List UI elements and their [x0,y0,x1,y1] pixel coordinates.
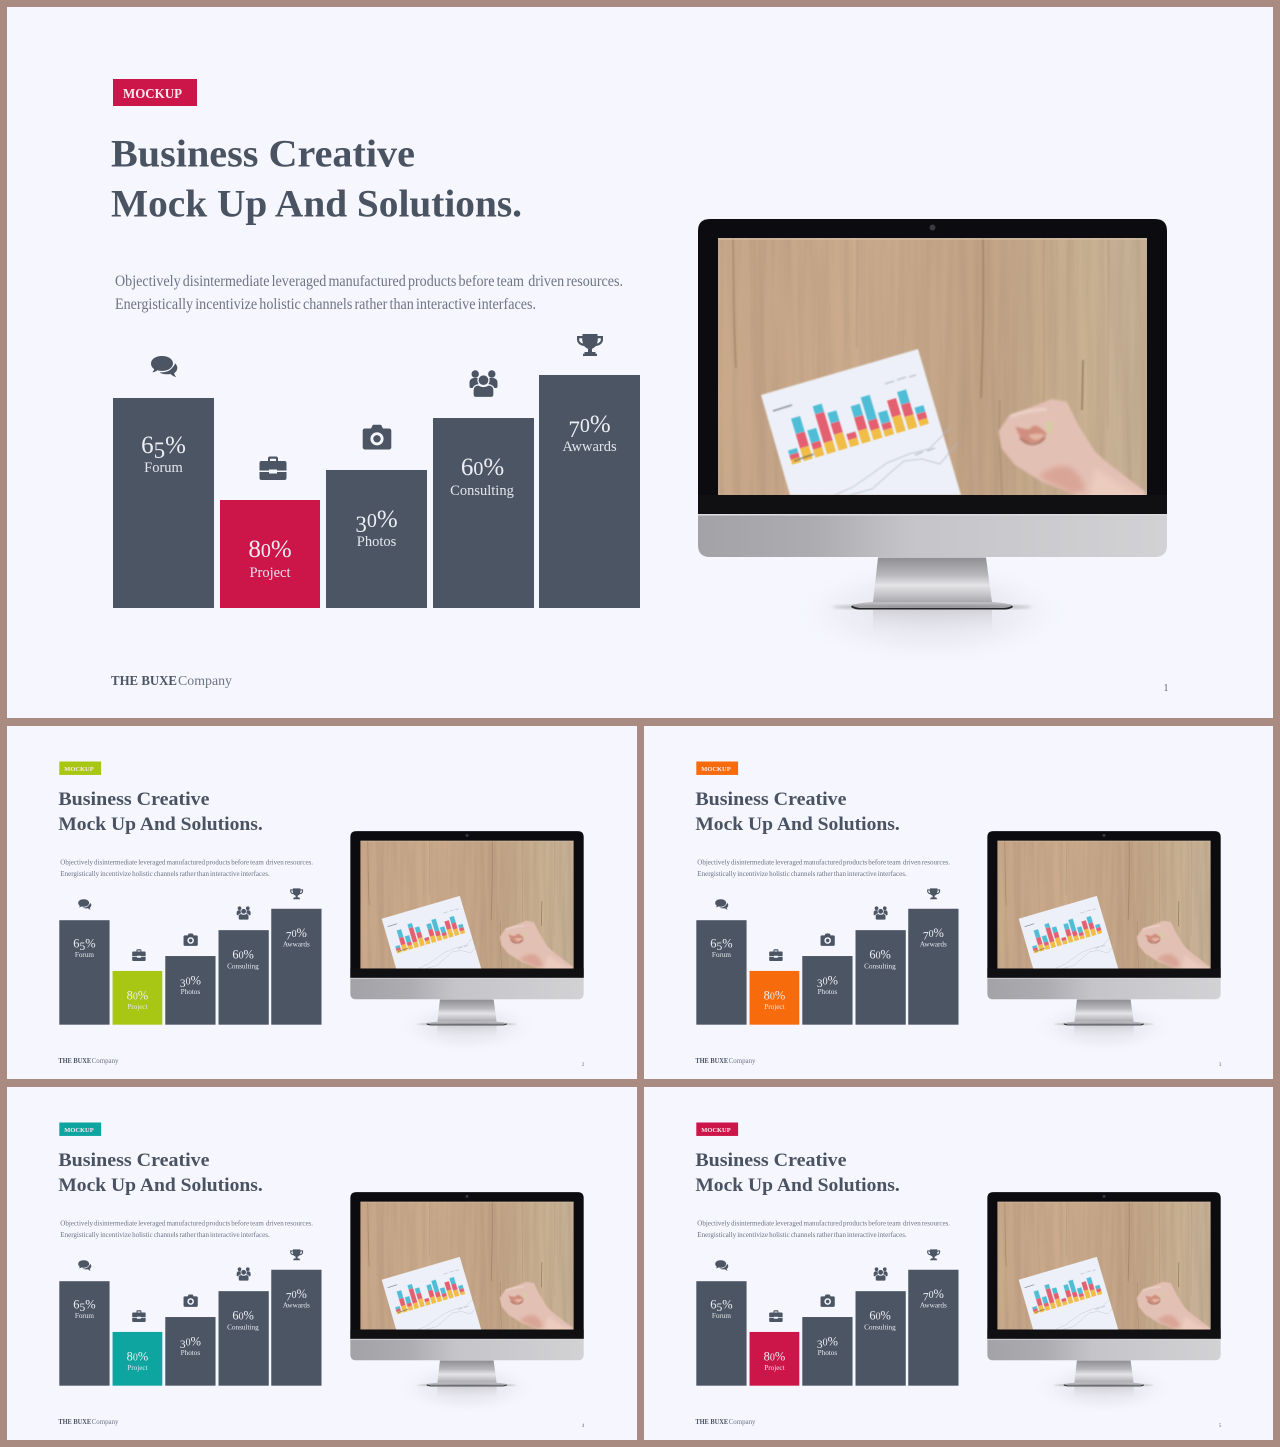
body text [60,857,313,878]
bar: project: Project [127,1003,148,1011]
icon: chat [151,356,177,377]
icon: chat [715,899,728,910]
monitor mockup [698,219,1167,667]
bar: consulting: 60% [232,1309,254,1323]
bar: awards: Awwards [920,941,947,949]
title: Business Creative [695,1150,847,1171]
footer brand: Company [92,1057,119,1065]
bar: photos: % [828,1334,838,1348]
icon: camera [821,934,835,946]
bar: awards: 0 [580,415,590,437]
bar: forum [696,1281,747,1386]
tag: mockup: MOCKUP [123,86,182,101]
bar: photos: Photos [181,1349,200,1357]
tag: mockup [59,1123,101,1136]
bar: forum: % [85,1298,96,1312]
tag: mockup [696,1123,738,1136]
bar: forum: 5 [80,941,86,953]
bar: photos [802,956,853,1025]
bar: project: Project [764,1003,785,1011]
slide 5 background [644,1087,1273,1440]
bar: awards: Awwards [562,439,617,455]
bar: consulting: 60% [869,948,891,962]
bar: awards: % [297,926,307,940]
slide 4: teal accent [58,1123,585,1429]
footer brand: Company [92,1418,119,1426]
bar: awards [271,909,322,1025]
body text: Objectively disintermediate leveraged manufactured products before team driven resources. [697,857,950,866]
footer brand: THE BUXE [58,1057,91,1065]
body text [115,273,623,313]
icon: trophy [290,1249,303,1260]
bar: photos: % [377,506,398,533]
title: Business Creative [111,132,415,176]
bar: forum: Forum [144,460,184,476]
bar: consulting: Consulting [450,483,514,499]
bar: project [113,1332,162,1386]
body text: Energistically incentivize holistic channels rather than interactive interfaces. [60,1230,270,1239]
bar: photos: 0 [186,976,191,987]
bar: forum: Forum [712,1312,731,1320]
bar: photos: 0 [367,510,377,532]
bar: forum: 6 [141,432,154,459]
bar: awards: % [590,411,611,438]
bar: forum: % [722,1298,733,1312]
bar: awards: 0 [929,1290,934,1301]
bar: forum: 5 [80,1302,86,1314]
title [58,789,263,835]
bar: consulting [219,1291,269,1386]
bar: consulting [856,1291,906,1386]
footer brand: Company [729,1418,756,1426]
monitor mockup [350,831,584,1054]
bar: photos [802,1317,853,1386]
icon: team [237,1267,251,1281]
bar: forum [59,1281,110,1386]
bar chart [59,909,321,1025]
icon: briefcase [132,1310,146,1322]
bar: consulting [219,930,269,1025]
slide 2 background [7,726,637,1079]
icon: camera [363,425,391,450]
icon: trophy [290,888,303,899]
bar: forum: 5 [717,1302,723,1314]
footer brand: THE BUXE [695,1057,728,1065]
bar: awards: 7 [286,1292,292,1304]
bar: consulting: Consulting [227,1323,259,1331]
page number: 2 [582,1063,585,1068]
bar: consulting: 60% [232,948,254,962]
tag: mockup [59,762,101,775]
icon: camera [184,934,198,946]
footer brand: Company [178,674,232,689]
bar: project: 80% [248,536,292,563]
bar: forum: 5 [154,438,165,463]
bar: project: Project [127,1364,148,1372]
bar: forum [59,920,110,1025]
bar: photos: Photos [818,1349,837,1357]
title: Business Creative [58,1150,210,1171]
bar: awards: 0 [292,929,297,940]
bar: photos: Photos [181,988,200,996]
footer brand [695,1418,756,1426]
icon: team [874,906,888,920]
bar: awards: % [934,926,944,940]
bar: project: 80% [127,988,148,1002]
icon: briefcase [132,949,146,961]
monitor mockup [987,831,1221,1054]
bar: forum: Forum [75,1312,94,1320]
title: Mock Up And Solutions. [695,814,900,835]
icon: briefcase [769,949,783,961]
bar: awards: 0 [929,929,934,940]
bar: project: Project [249,565,291,581]
page number: 4 [582,1424,585,1429]
bar: photos: % [191,973,201,987]
bar: forum: 6 [710,937,717,951]
body text: Energistically incentivize holistic channels rather than interactive interfaces. [697,1230,907,1239]
body text: Energistically incentivize holistic channels rather than interactive interfaces. [60,869,270,878]
bar: consulting: Consulting [227,962,259,970]
footer brand [58,1057,119,1065]
bar: photos [165,956,216,1025]
title [58,1150,263,1196]
bar: photos: 0 [823,1337,828,1348]
footer brand: THE BUXE [111,674,177,689]
bar: project: Project [764,1364,785,1372]
bar: photos: 3 [355,512,367,537]
tag: mockup: MOCKUP [701,766,731,773]
slide 5: crimson accent [695,1123,1222,1429]
bar: awards [908,1270,958,1386]
tag: mockup: MOCKUP [701,1127,731,1134]
icon: chat [715,1260,728,1271]
body text: Objectively disintermediate leveraged manufactured products before team driven resources. [697,1218,950,1227]
bar: photos: Photos [818,988,837,996]
title: Mock Up And Solutions. [111,182,522,226]
bar: project: 80% [764,988,785,1002]
bar chart [59,1270,321,1386]
icon: team [237,906,251,920]
bar: awards [271,1270,322,1386]
bar: awards: % [297,1287,307,1301]
body text [60,1218,313,1239]
footer brand [58,1418,119,1426]
bar: photos: 0 [823,976,828,987]
bar chart [113,375,640,608]
footer brand: THE BUXE [58,1418,91,1426]
bar: forum: 6 [73,937,80,951]
bar: awards: 7 [286,931,292,943]
bar: photos [326,470,427,608]
page number: 1 [1164,683,1168,694]
bar: awards: Awwards [920,1302,947,1310]
body text: Energistically incentivize holistic channels rather than interactive interfaces. [115,296,536,313]
bar: forum [696,920,747,1025]
icon: briefcase [260,456,286,480]
footer brand: Company [729,1057,756,1065]
bar: photos: 3 [817,978,823,990]
monitor mockup [350,1192,584,1415]
footer brand: THE BUXE [695,1418,728,1426]
bar: awards: 7 [568,417,580,442]
monitor mockup [987,1192,1221,1415]
icon: chat [78,1260,91,1271]
tag: mockup: MOCKUP [64,766,94,773]
bar: photos: Photos [357,534,397,550]
bar: photos: 0 [186,1337,191,1348]
footer brand [111,674,232,689]
bar: consulting: 60% [461,454,504,481]
icon: trophy [927,1249,940,1260]
body text: Objectively disintermediate leveraged manufactured products before team driven resources. [115,273,623,290]
bar: awards: 7 [923,1292,929,1304]
body text [697,1218,950,1239]
bar: photos: 3 [180,978,186,990]
bar: forum [113,398,214,608]
icon: team [874,1267,888,1281]
title: Business Creative [695,789,847,810]
icon: briefcase [769,1310,783,1322]
bar: forum: 6 [73,1298,80,1312]
icon: camera [184,1295,198,1307]
slide 2: green accent [58,762,585,1068]
body text [697,857,950,878]
bar: awards: % [934,1287,944,1301]
bar: project [113,971,162,1025]
bar: forum: Forum [75,951,94,959]
title [111,132,522,226]
bar: forum: % [722,937,733,951]
icon: chat [78,899,91,910]
title [695,1150,900,1196]
bar: consulting: Consulting [864,962,896,970]
bar: project [220,500,320,608]
bar: awards: Awwards [283,941,310,949]
bar chart [696,1270,958,1386]
bar: awards: 0 [292,1290,297,1301]
slide 1: main slide [7,7,1273,718]
bar: consulting: Consulting [864,1323,896,1331]
bar: forum: 6 [710,1298,717,1312]
bar: forum: 5 [717,941,723,953]
tag: mockup [696,762,738,775]
bar: photos: % [828,973,838,987]
bar: consulting [856,930,906,1025]
title: Mock Up And Solutions. [58,814,263,835]
body text: Objectively disintermediate leveraged manufactured products before team driven resources. [60,857,313,866]
bar: consulting: 60% [869,1309,891,1323]
bar: project [750,1332,799,1386]
bar: photos: 3 [180,1339,186,1351]
bar: consulting [433,418,534,608]
title [695,789,900,835]
bar: forum: Forum [712,951,731,959]
footer brand [695,1057,756,1065]
bar: forum: % [165,432,186,459]
bar: project [750,971,799,1025]
bar: photos: % [191,1334,201,1348]
bar chart [696,909,958,1025]
tag: mockup [113,79,197,106]
title: Business Creative [58,789,210,810]
title: Mock Up And Solutions. [695,1175,900,1196]
bar: awards [908,909,958,1025]
bar: photos: 3 [817,1339,823,1351]
bar: awards: Awwards [283,1302,310,1310]
icon: trophy [577,334,603,356]
page number: 3 [1219,1063,1222,1068]
tag: mockup: MOCKUP [64,1127,94,1134]
title: Mock Up And Solutions. [58,1175,263,1196]
body text: Objectively disintermediate leveraged manufactured products before team driven resources. [60,1218,313,1227]
bar: awards [539,375,640,608]
bar: project: 80% [764,1349,785,1363]
page number: 5 [1219,1424,1222,1429]
bar: awards: 7 [923,931,929,943]
icon: trophy [927,888,940,899]
bar: forum: % [85,937,96,951]
bar: project: 80% [127,1349,148,1363]
slide 4 background [7,1087,637,1440]
bar: photos [165,1317,216,1386]
body text: Energistically incentivize holistic channels rather than interactive interfaces. [697,869,907,878]
icon: camera [821,1295,835,1307]
slide 3: orange accent [695,762,1222,1068]
icon: team [470,370,498,398]
slide 3 background [644,726,1273,1079]
